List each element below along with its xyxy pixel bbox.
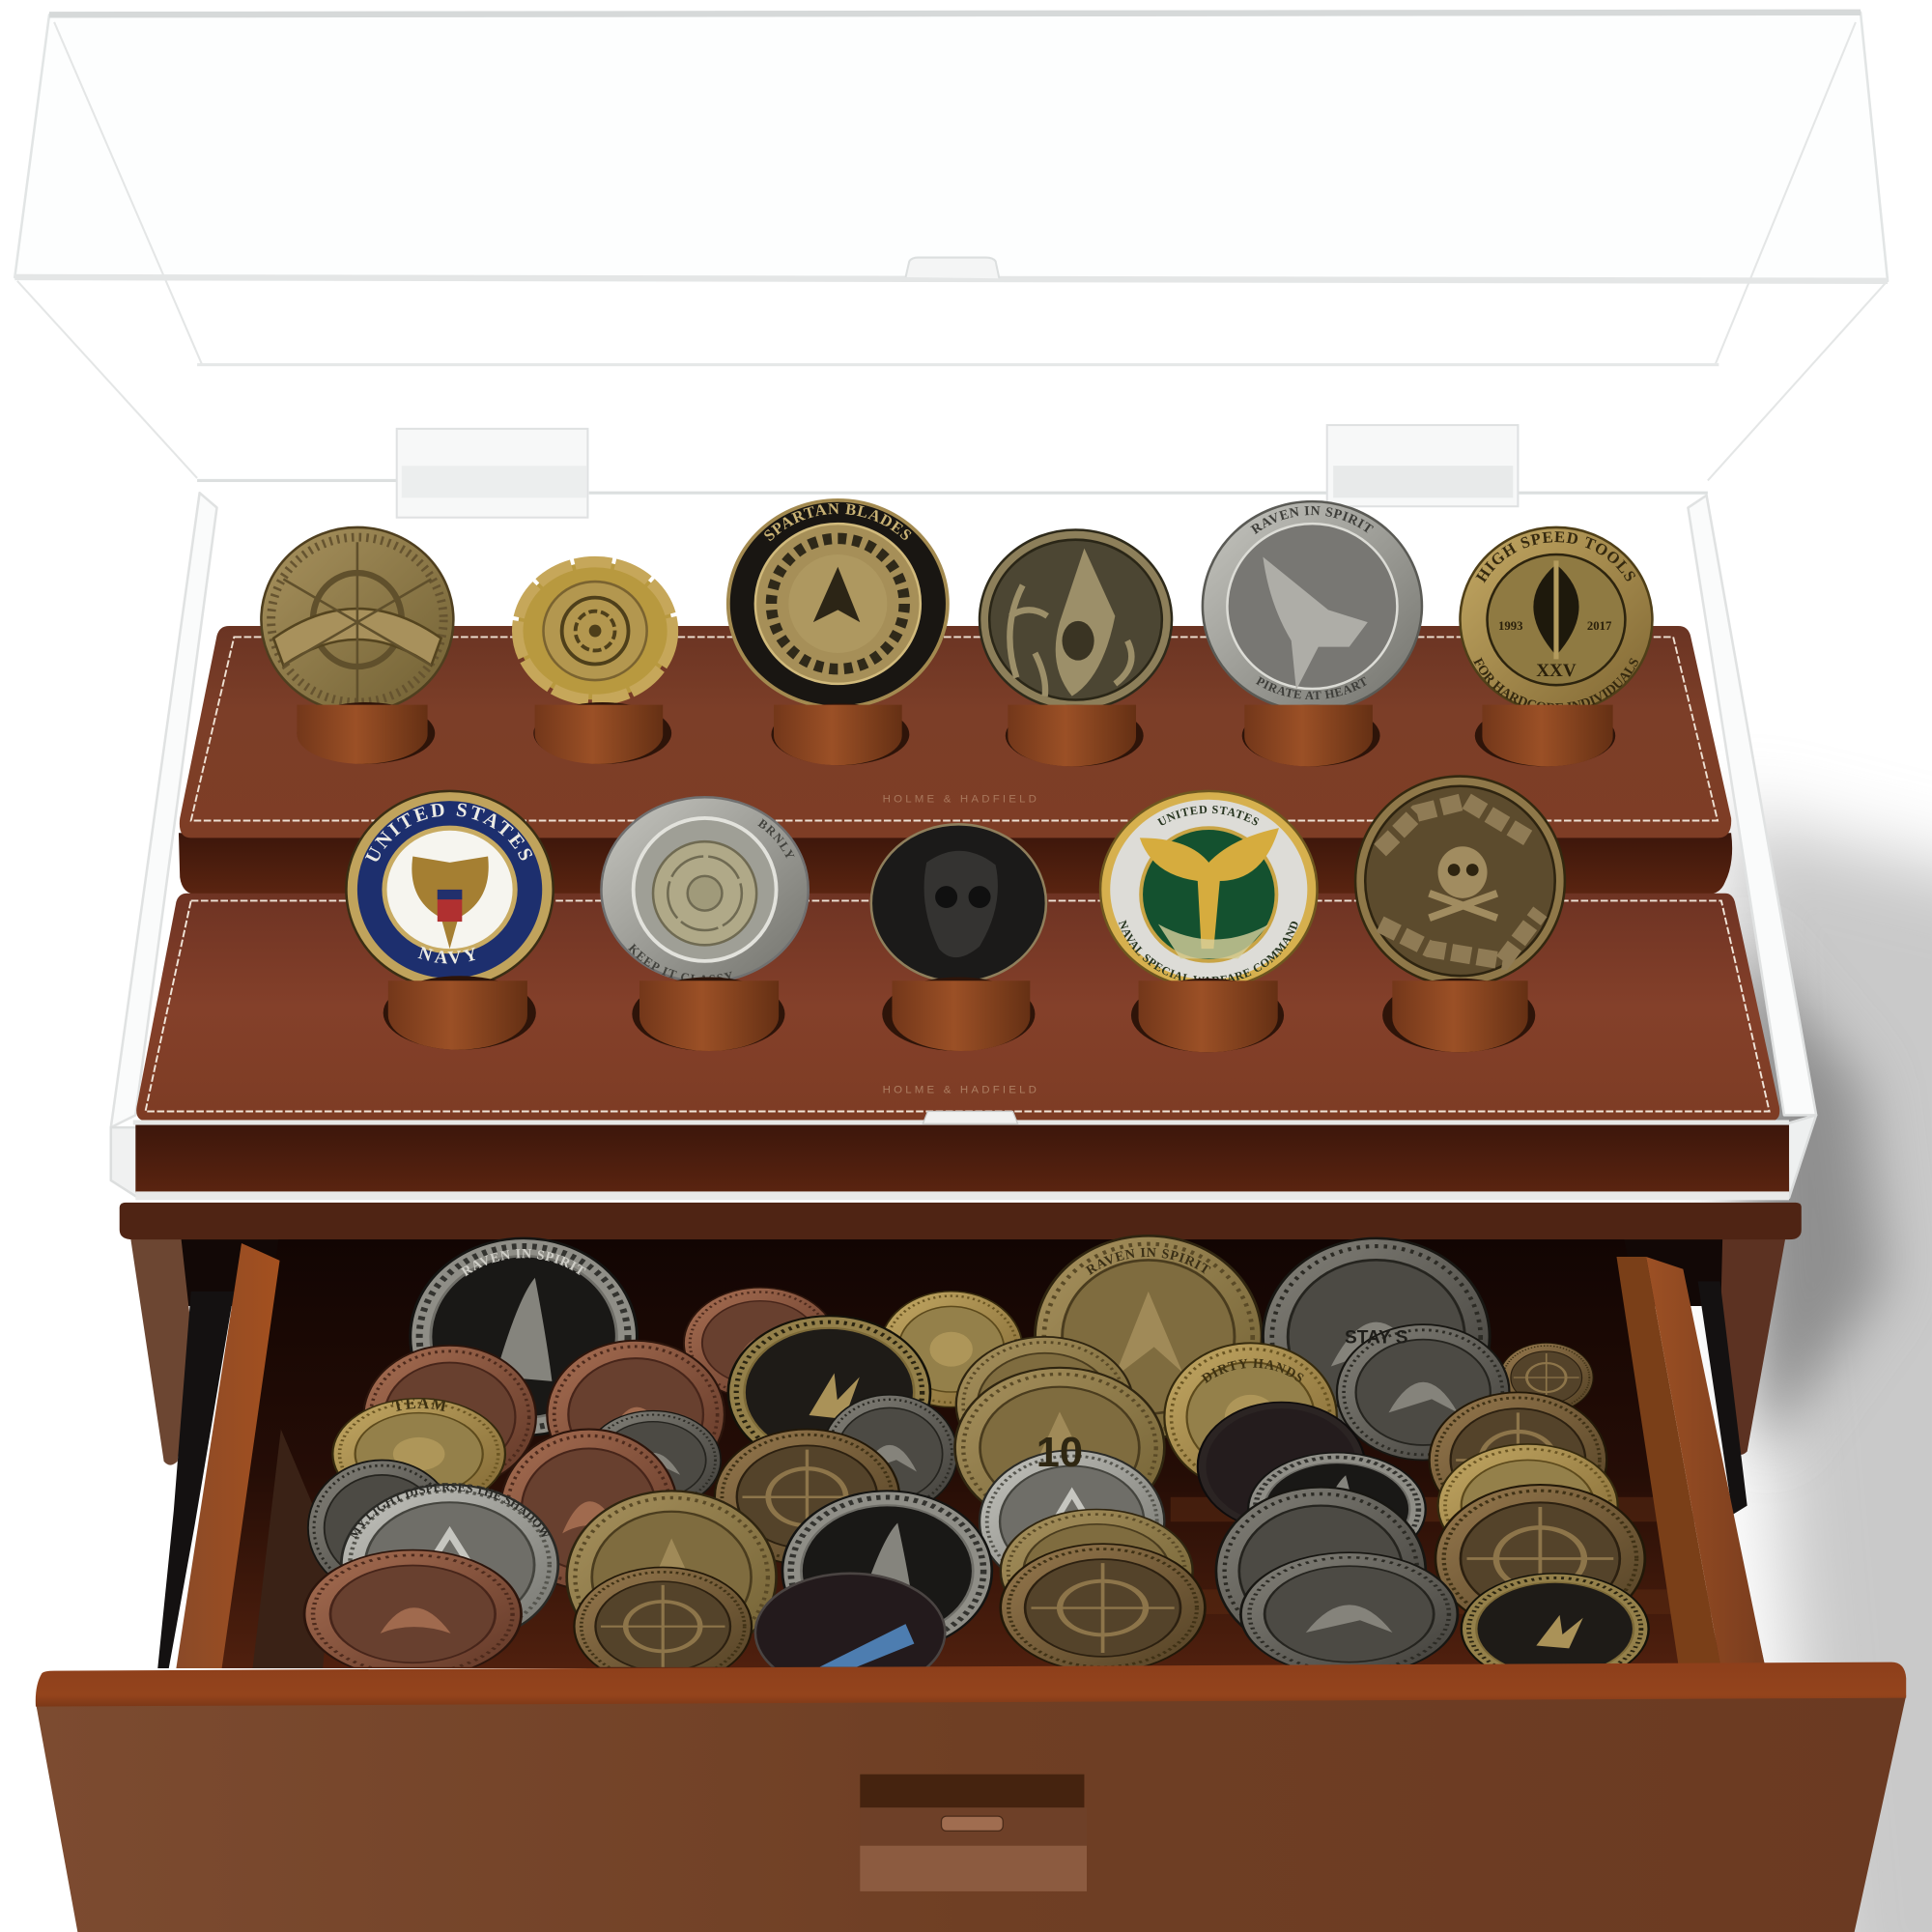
coin inscription: FOR HARDCORE INDIVIDUALS xyxy=(1473,657,1638,705)
coin: black and gold xyxy=(726,1315,931,1442)
coin: thin blue line xyxy=(755,1574,945,1691)
leather tier: upper xyxy=(179,626,1732,895)
coin: Naval Special Warfare Command xyxy=(1100,791,1318,988)
coin: olive brass raven xyxy=(1035,1236,1262,1438)
upper row pedestals xyxy=(297,702,1615,766)
coin inscription: NAVAL SPECIAL WARFARE COMMAND xyxy=(1119,920,1298,981)
coin: brass rear xyxy=(954,1336,1132,1424)
coin: bronze behind compass xyxy=(1001,1509,1193,1633)
acrylic hinge: right xyxy=(1327,425,1518,506)
coin: dark gear xyxy=(1198,1403,1365,1530)
coin: compass xyxy=(1001,1544,1205,1672)
coin: dark gray xyxy=(599,1410,722,1493)
coin: numeral ten xyxy=(953,1366,1166,1503)
coin years: 1993 xyxy=(1498,619,1523,633)
brand stamp: lower tier: HOLME & HADFIELD xyxy=(883,1084,1039,1095)
coin: black silver rope xyxy=(782,1491,992,1651)
brand stamp: upper tier: HOLME & HADFIELD xyxy=(883,793,1039,805)
drawer side rail: left xyxy=(176,1243,280,1668)
coin: black gold anniversary xyxy=(1462,1574,1649,1685)
engraving: MY LIGHT DISPERSES THE SHADOW xyxy=(351,1483,549,1540)
coin: olive front xyxy=(574,1567,752,1686)
coin engravings xyxy=(347,1245,1408,1542)
engraving: STAY S xyxy=(1345,1327,1408,1348)
coin: black skull xyxy=(871,824,1046,982)
engraving: DIRTY HANDS xyxy=(1201,1358,1304,1383)
coin: gold mountain xyxy=(565,1490,778,1634)
coin: bronze skull and crossed swords xyxy=(1355,777,1565,985)
engraving: RAVEN IN SPIRIT xyxy=(1085,1248,1211,1275)
coin inscription: UNITED STATES xyxy=(365,804,533,862)
coin: silver serpent xyxy=(1240,1552,1458,1676)
coin: copper leaf xyxy=(684,1288,837,1399)
coin: silver olive xyxy=(829,1395,956,1499)
coin: triangle pattern xyxy=(1435,1485,1645,1633)
coin inscription: BRNLY xyxy=(757,819,794,858)
coin: kraken xyxy=(980,529,1172,710)
coin inscription: PIRATE AT HEART xyxy=(1256,676,1367,699)
coin numeral: XXV xyxy=(1536,661,1577,681)
coin inscription: KEEP IT CLASSY xyxy=(628,943,732,980)
coin: crumpled iron xyxy=(1337,1324,1509,1460)
acrylic hinge: left xyxy=(397,429,587,518)
acrylic front strips and latch xyxy=(133,1112,1789,1200)
cabinet side panels, black slides and top shelf xyxy=(120,1203,1802,1668)
drawer interior xyxy=(216,1239,1722,1668)
coin: brown xyxy=(363,1346,536,1489)
acrylic case lower walls xyxy=(111,493,1816,1198)
engraving: 10 xyxy=(1037,1430,1083,1476)
coin inscription: NAVY xyxy=(417,947,475,964)
coin: copper ring xyxy=(546,1339,725,1443)
coin inscription: UNITED STATES xyxy=(1157,806,1260,825)
acrylic lid (open) xyxy=(14,13,1888,493)
coin: gunmetal stay xyxy=(1263,1238,1490,1435)
coin: gold scalloped rosette xyxy=(518,562,672,699)
coin: gold waves xyxy=(880,1292,1023,1407)
coin: Brnly silver rosette xyxy=(601,797,809,986)
coin inscription: HIGH SPEED TOOLS xyxy=(1476,531,1636,583)
engraving: TEAM xyxy=(392,1399,445,1412)
cast shadow on the right xyxy=(1725,813,1932,1932)
coin inscription: RAVEN IN SPIRIT xyxy=(1250,506,1374,534)
coin: United States Navy xyxy=(346,791,554,988)
coin: copper relief xyxy=(500,1430,678,1589)
coin: Spartan Blades xyxy=(726,498,950,705)
coin: gold tulip xyxy=(715,1430,899,1565)
leather tier: lower xyxy=(135,894,1789,1193)
coin: gray left xyxy=(307,1459,440,1574)
coin: wheel banner xyxy=(261,527,453,712)
coin: gold right stack xyxy=(1437,1443,1619,1528)
coin: black Raven in Spirit xyxy=(411,1238,637,1435)
coin: Raven in Spirit silver xyxy=(1202,500,1424,705)
coin: small bronze xyxy=(1503,1343,1594,1406)
stacked coins in drawer xyxy=(303,1235,1650,1667)
coin: High Speed Tools xyxy=(1460,527,1652,716)
coin: black rim xyxy=(1247,1452,1427,1535)
coin: copper dragon xyxy=(304,1550,522,1678)
drawer side rail: right xyxy=(1616,1257,1765,1663)
coin: My Light Disperses xyxy=(341,1485,558,1645)
coin: Dirty Hands xyxy=(1164,1343,1337,1491)
coin: bronze right stack xyxy=(1428,1391,1607,1492)
coin inscription: SPARTAN BLADES xyxy=(764,503,912,541)
drawer front xyxy=(36,1662,1906,1932)
coin: blue silver xyxy=(978,1449,1165,1567)
coin: Team xyxy=(331,1398,506,1489)
engraving: RAVEN IN SPIRIT xyxy=(460,1249,586,1277)
lower row pedestals xyxy=(384,976,1535,1052)
coin: silver elephant xyxy=(1216,1488,1426,1655)
coin years: 2017 xyxy=(1587,619,1612,633)
drawer pull recess xyxy=(860,1775,1087,1891)
